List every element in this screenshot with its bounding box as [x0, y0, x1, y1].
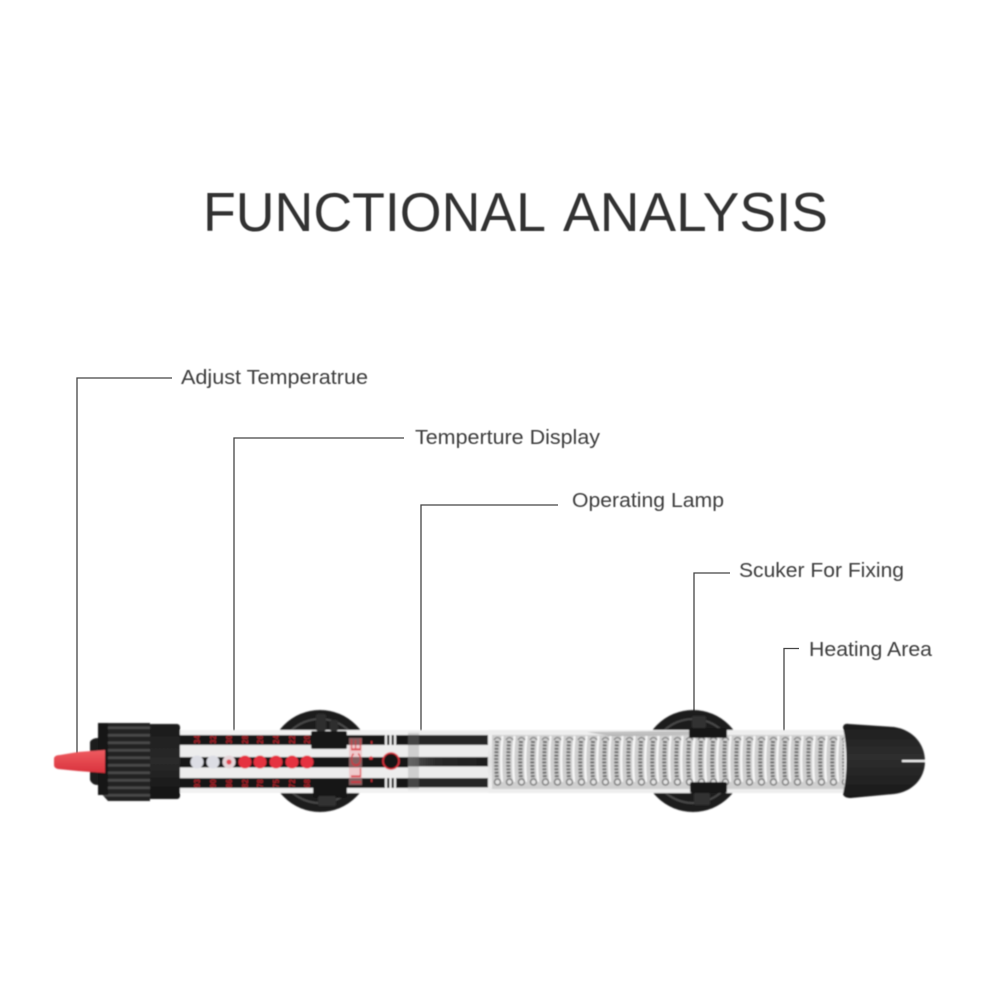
scale numbers: celsius: 22	[288, 735, 297, 744]
scale numbers: celsius: 30	[225, 735, 234, 744]
brand mark	[348, 738, 373, 785]
adjustment knob	[90, 723, 180, 801]
registered mark	[383, 753, 399, 769]
scale numbers: fahrenheit: 86	[225, 779, 234, 788]
scale numbers: fahrenheit: 82	[241, 779, 250, 788]
scale numbers: celsius: 26	[256, 735, 265, 744]
scale numbers: fahrenheit: 93	[193, 779, 202, 788]
scale numbers: fahrenheit: 75	[272, 779, 281, 788]
scale numbers: celsius: 28	[241, 735, 250, 744]
label: temperature display: Temperture Display	[415, 426, 601, 449]
scale numbers: celsius: 24	[272, 735, 281, 744]
display tube with scale	[178, 730, 490, 793]
sucker cup: right	[642, 710, 744, 812]
heater product illustration	[54, 710, 925, 812]
label: operating lamp	[421, 489, 724, 757]
scale numbers: fahrenheit: 68	[303, 779, 312, 788]
label: heating area	[784, 638, 933, 741]
label: heating area: Heating Area	[809, 638, 933, 661]
suction clips	[311, 714, 727, 806]
sucker cup: left	[269, 710, 371, 812]
scale numbers: fahrenheit: 90	[209, 779, 218, 788]
heating coil	[488, 730, 846, 793]
label: sucker for fixing: Scuker For Fixing	[739, 559, 904, 582]
label: sucker for fixing	[694, 559, 904, 726]
label: operating lamp: Operating Lamp	[572, 489, 724, 512]
scale numbers: celsius	[193, 735, 312, 744]
label: temperature display	[234, 426, 601, 762]
red adjustment tip	[54, 750, 105, 773]
label: adjust temperature: Adjust Temperatrue	[181, 366, 368, 389]
scale numbers: fahrenheit: 72	[288, 779, 297, 788]
title: ANALYSIS	[563, 181, 828, 243]
scale numbers: fahrenheit	[193, 779, 312, 788]
white tick stripes	[385, 735, 396, 788]
scale numbers: celsius: 20	[303, 735, 312, 744]
scale numbers: celsius: 34	[193, 735, 202, 744]
title	[203, 181, 828, 243]
indicator dots	[190, 756, 314, 768]
scale numbers: fahrenheit: 78	[256, 779, 265, 788]
operating lamp section	[408, 731, 489, 791]
brand mark: ILCE	[348, 738, 365, 785]
end cap	[843, 724, 925, 798]
label: adjust temperature	[77, 366, 368, 755]
scale numbers: celsius: 32	[209, 735, 218, 744]
title: FUNCTIONAL	[203, 181, 546, 243]
